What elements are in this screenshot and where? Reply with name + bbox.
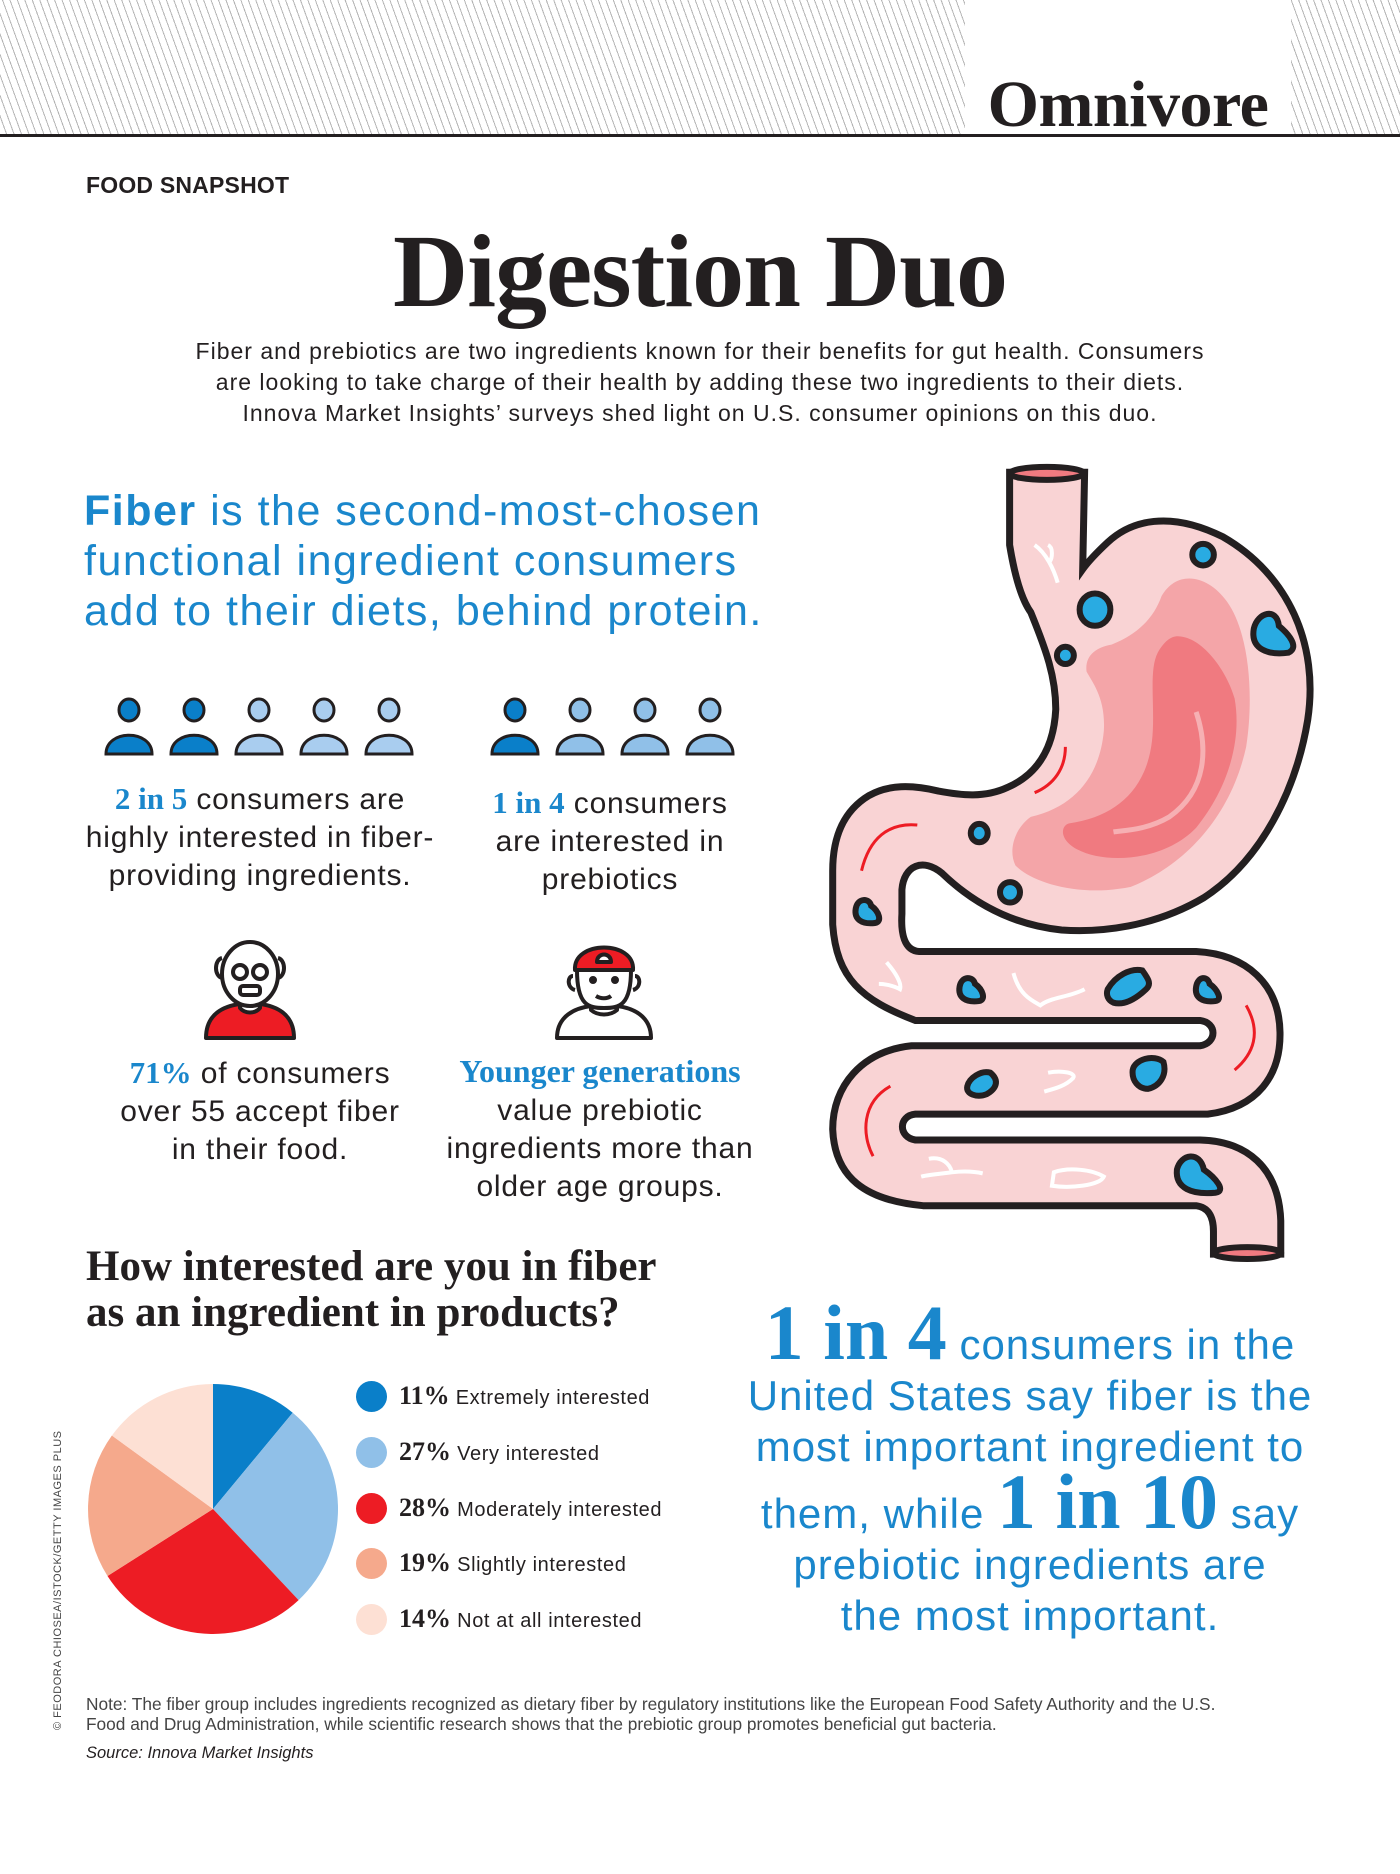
fiber heading: add to their diets, behind protein. xyxy=(84,587,763,635)
stat: younger generations xyxy=(446,1053,753,1203)
big callout: 1 in 4 / 1 in 10: 1 in 4 consumers in the xyxy=(765,1289,1295,1376)
legend item: not at all: 14% Not at all interested xyxy=(399,1604,642,1633)
photo credit vertical: © FEODORA CHIOSEA/ISTOCK/GETTY IMAGES PLUS xyxy=(52,1431,64,1730)
masthead box xyxy=(965,0,1291,135)
header hatch band xyxy=(0,0,1400,135)
note xyxy=(86,1694,1215,1734)
stat: 1 in 4 prebiotics xyxy=(492,785,728,896)
legend item: slightly: 19% Slightly interested xyxy=(399,1548,626,1577)
stat: 2 in 5: providing ingredients. xyxy=(109,859,411,892)
fiber heading: Fiber is the second-most-chosen xyxy=(84,487,761,535)
pie chart xyxy=(88,1384,338,1634)
masthead: Omnivore: Omnivore xyxy=(988,68,1268,141)
stat: 1 in 4 prebiotics: are interested in xyxy=(496,825,724,858)
legend item: moderately: 28% Moderately interested xyxy=(399,1493,662,1522)
note: Food and Drug Administration, while scientific research shows that the prebiotic group promotes beneficial gut bacteria. xyxy=(86,1714,997,1734)
people icons: 2 in 5 xyxy=(104,698,414,756)
icon: young man with cap xyxy=(555,946,653,1040)
source: Source: Innova Market Insights xyxy=(86,1744,313,1762)
big callout: 1 in 4 / 1 in 10: United States say fiber is the xyxy=(748,1372,1312,1419)
stat: 1 in 4 prebiotics: 1 in 4 consumers xyxy=(492,785,728,820)
icon: older man xyxy=(204,940,296,1040)
chart heading: as an ingredient in products? xyxy=(86,1289,620,1336)
stat: 71% over 55: in their food. xyxy=(172,1133,348,1166)
intro text: are looking to take charge of their health by adding these two ingredients to their diets. xyxy=(216,369,1184,395)
big callout: 1 in 4 / 1 in 10 xyxy=(748,1289,1312,1639)
fiber heading: functional ingredient consumers xyxy=(84,537,738,585)
stat: younger generations: ingredients more than xyxy=(446,1132,753,1165)
fiber heading xyxy=(84,487,763,635)
legend item: extremely: 11% Extremely interested xyxy=(399,1381,650,1410)
stat: 71% over 55: over 55 accept fiber xyxy=(120,1095,400,1128)
section label: FOOD SNAPSHOT xyxy=(86,172,289,198)
big callout: 1 in 4 / 1 in 10: the most important. xyxy=(841,1592,1219,1639)
big callout: 1 in 4 / 1 in 10: them, while 1 in 10 say xyxy=(761,1458,1299,1545)
intro text: Fiber and prebiotics are two ingredients known for their benefits for gut health. Consumers xyxy=(196,338,1204,364)
intro text xyxy=(196,338,1204,426)
stat: 1 in 4 prebiotics: prebiotics xyxy=(542,863,678,896)
note: Note: The fiber group includes ingredients recognized as dietary fiber by regulatory institutions like the European Food Safety Authority and the U.S. xyxy=(86,1694,1215,1714)
legend item: very: 27% Very interested xyxy=(399,1437,600,1466)
stat: younger generations: Younger generations xyxy=(459,1053,741,1089)
stat: 2 in 5: highly interested in fiber- xyxy=(86,821,434,854)
chart heading xyxy=(86,1243,656,1336)
chart heading: How interested are you in fiber xyxy=(86,1243,656,1290)
big callout: 1 in 4 / 1 in 10: prebiotic ingredients are xyxy=(793,1541,1267,1588)
header rule xyxy=(0,134,1400,137)
title: Digestion Duo xyxy=(393,214,1007,329)
legend xyxy=(356,1381,662,1635)
stat: 2 in 5: 2 in 5 consumers are xyxy=(115,781,405,816)
stat: 71% over 55: 71% of consumers xyxy=(130,1055,390,1090)
stat: 2 in 5 xyxy=(86,781,434,892)
intro text: Innova Market Insights’ surveys shed light on U.S. consumer opinions on this duo. xyxy=(242,400,1157,426)
stat: 71% over 55 xyxy=(120,1055,400,1166)
big callout: 1 in 4 / 1 in 10: most important ingredient to xyxy=(756,1423,1304,1470)
stat: younger generations: value prebiotic xyxy=(497,1094,703,1127)
stat: younger generations: older age groups. xyxy=(476,1170,724,1203)
people icons: 1 in 4 xyxy=(490,698,734,756)
illustration: stomach and intestines xyxy=(829,464,1314,1262)
